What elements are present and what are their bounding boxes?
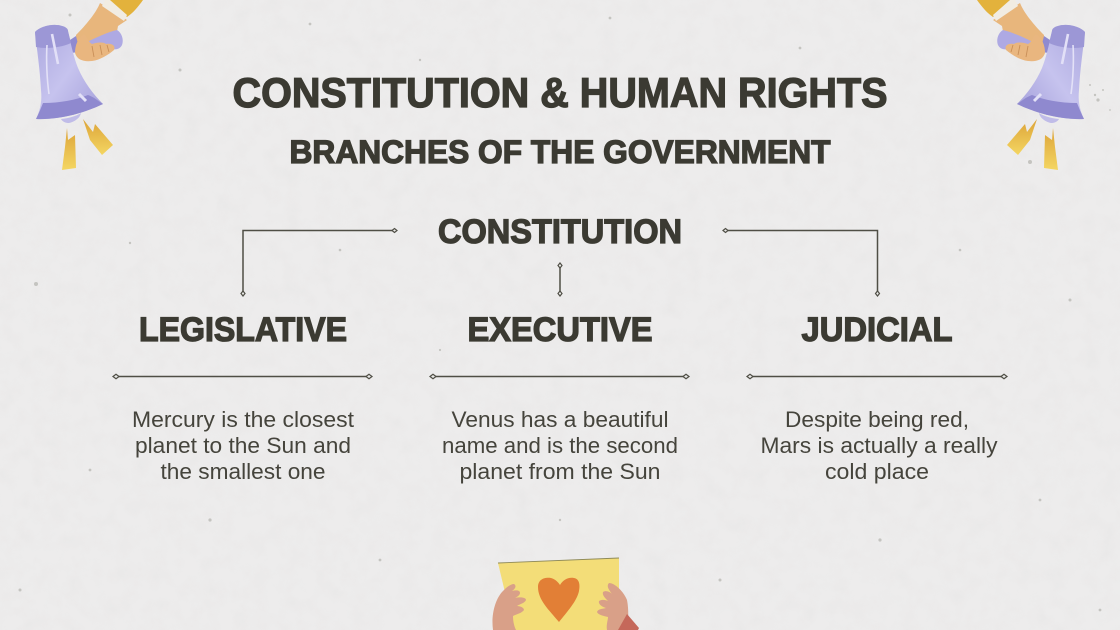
- text: legislative description: Mercury is the closest: [132, 407, 354, 432]
- connector: constitution to legislative: [241, 228, 397, 296]
- text: judicial description: Mars is actually a really: [760, 433, 998, 458]
- text: judicial description: [760, 407, 998, 484]
- icon: megaphone right: [977, 0, 1085, 170]
- text: legislative description: [132, 407, 354, 484]
- text: executive description: name and is the second: [442, 433, 678, 458]
- text: legislative description: planet to the Sun and: [135, 433, 351, 458]
- text: executive description: [442, 407, 678, 484]
- text: executive description: planet from the Sun: [460, 459, 660, 484]
- title: CONSTITUTION & HUMAN RIGHTS: [232, 69, 888, 116]
- divider: judicial: [747, 374, 1007, 379]
- heading: legislative: LEGISLATIVE: [139, 311, 347, 349]
- divider: executive: [430, 374, 689, 379]
- panel: executive: [430, 311, 689, 484]
- connector: constitution to executive: [558, 263, 562, 296]
- left hand: [492, 584, 526, 630]
- heading: constitution: CONSTITUTION: [438, 213, 682, 251]
- right hand: [597, 583, 628, 630]
- subtitle: BRANCHES OF THE GOVERNMENT: [290, 134, 831, 170]
- icon: sign with heart held by hands: [492, 558, 639, 630]
- heading: executive: EXECUTIVE: [468, 311, 652, 349]
- text: judicial description: Despite being red,: [785, 407, 969, 432]
- icon: megaphone left: [35, 0, 143, 170]
- connector: constitution to judicial: [723, 228, 880, 296]
- text: legislative description: the smallest one: [160, 459, 326, 484]
- panel: legislative: [113, 311, 372, 484]
- text: judicial description: cold place: [825, 459, 929, 484]
- heading: judicial: JUDICIAL: [802, 311, 952, 349]
- divider: legislative: [113, 374, 372, 379]
- text: executive description: Venus has a beautiful: [452, 407, 668, 432]
- panel: judicial: [747, 311, 1007, 484]
